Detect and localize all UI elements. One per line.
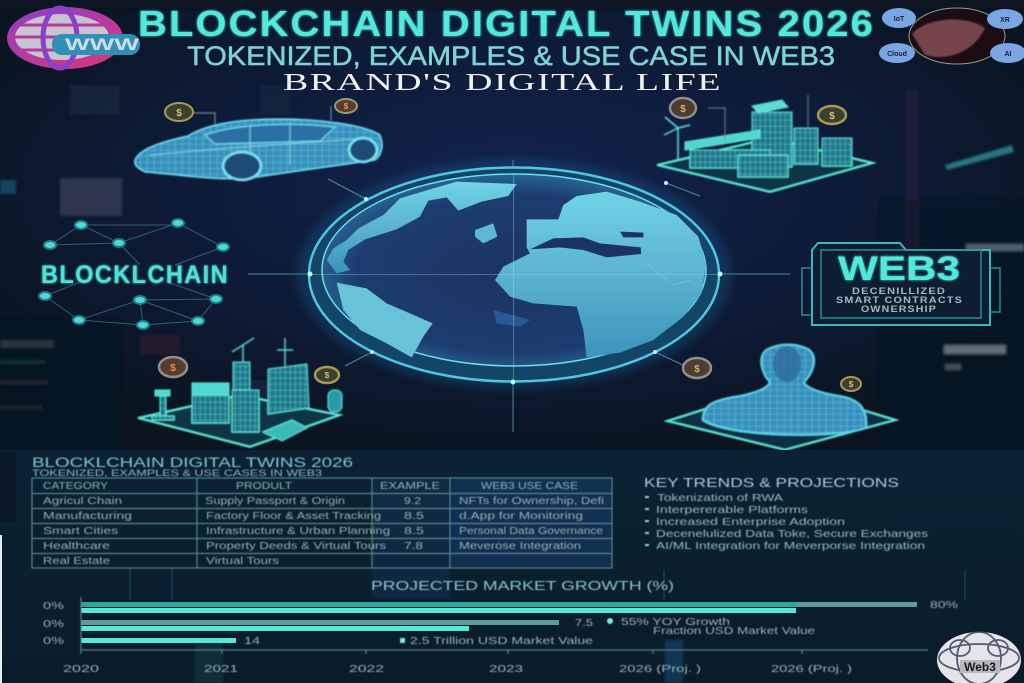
factory hologram xyxy=(657,95,873,192)
web3 panel: SMART CONTRACTS xyxy=(836,295,963,305)
table row: manufacturing: Manufacturing xyxy=(43,511,132,522)
key trends: Interpererable Platforms xyxy=(656,504,808,516)
mediterranean xyxy=(530,237,641,257)
globe xyxy=(296,158,732,390)
table row: agriculture: NFTs for Ownership, Defi xyxy=(459,496,604,507)
coin: city left xyxy=(159,357,187,377)
chart value labels: 0% xyxy=(43,635,64,647)
subtitle: TOKENIZED, EXAMPLES & USE CASE IN WEB3 xyxy=(187,41,835,71)
table row: healthcare: Healthcare xyxy=(43,541,111,552)
web3 panel: OWNERSHIP xyxy=(861,304,937,314)
chart axis: 2021 xyxy=(204,663,238,675)
table row: healthcare: Property Deeds & Virtual Tours xyxy=(206,541,386,552)
coin: city right: $ xyxy=(325,371,330,380)
logo: IoT badge: AI xyxy=(1004,51,1012,58)
table row: healthcare xyxy=(43,541,581,552)
table row: smart cities: Smart Cities xyxy=(43,526,118,537)
chart bars xyxy=(81,602,917,643)
chart axis: 2026 (Proj. ) xyxy=(771,663,852,675)
land: europe and africa xyxy=(495,192,706,357)
key trends: Increased Enterprise Adoption xyxy=(656,516,845,528)
key trends: Tokenization of RWA xyxy=(657,492,783,504)
table xyxy=(32,478,612,568)
coin: factory left xyxy=(670,98,696,118)
chart annotation: market value: 2.5 Trillion USD Market Value xyxy=(410,635,593,647)
table header row: PRODULT xyxy=(236,481,292,492)
chart: projected market growth xyxy=(43,578,958,675)
key trends: Decenelulized Data Toke, Secure Exchanges xyxy=(656,528,928,540)
table row: real estate: Virtual Tours xyxy=(206,556,279,567)
coin: car left: $ xyxy=(176,108,182,119)
coin: car left xyxy=(165,103,193,121)
person hologram xyxy=(667,344,896,450)
web3 panel: WEB3 xyxy=(838,250,960,288)
logo: IoT badge: Cloud xyxy=(887,51,907,58)
chart annotation: yoy growth: Fraction USD Market Value xyxy=(653,625,815,637)
chart axis: 2020 xyxy=(63,663,99,675)
chart axis: 2022 xyxy=(349,663,384,675)
key trends: AI/ML Integration for Meverporse Integration xyxy=(656,540,925,552)
table header row: CATEGORY xyxy=(43,481,108,492)
table row: manufacturing: d.App for Monitoring xyxy=(459,511,583,522)
chart value labels: 14 xyxy=(244,635,260,647)
table row: agriculture: Agricul Chain xyxy=(43,496,122,507)
coin: city right xyxy=(315,367,339,383)
logo: IoT badge: XR xyxy=(1000,17,1010,24)
chart value labels: 80% xyxy=(930,599,958,611)
table row: smart cities: 8.5 xyxy=(404,526,425,537)
logo: www globe xyxy=(7,7,140,69)
table row: healthcare: 7.8 xyxy=(404,541,424,552)
blockchain label: BLOCKLCHAIN xyxy=(41,261,229,289)
table row: manufacturing xyxy=(43,511,583,522)
table row: smart cities: Personal Data Governance xyxy=(459,526,604,537)
coin: person left: $ xyxy=(694,364,700,375)
key trends: KEY TRENDS & PROJECTIONS xyxy=(644,476,899,490)
table heading xyxy=(32,455,353,478)
logo: web3 badge xyxy=(937,632,1021,683)
city hologram xyxy=(138,338,342,447)
table row: agriculture: Supply Passport & Origin xyxy=(205,496,345,507)
blockchain network xyxy=(39,219,229,329)
coin: person left xyxy=(683,358,711,378)
land: south america xyxy=(337,283,433,357)
logo: IoT badge: IoT xyxy=(894,16,905,23)
chart axis xyxy=(63,597,928,675)
key trends xyxy=(644,476,928,552)
logo: IoT badge xyxy=(879,8,1024,64)
coin: city left: $ xyxy=(170,363,176,374)
chart annotation: yoy growth xyxy=(607,616,815,637)
coin: factory right xyxy=(818,106,846,124)
table row: smart cities xyxy=(43,526,604,537)
table row: real estate xyxy=(43,556,279,567)
table header row: WEB3 USE CASE xyxy=(481,481,578,492)
table header row xyxy=(43,481,578,492)
chart axis: 2023 xyxy=(489,663,523,675)
table row: agriculture xyxy=(43,496,604,507)
lower panel xyxy=(0,450,1024,683)
table row: manufacturing: Factory Floor & Asset Tracking xyxy=(206,511,381,522)
web3 panel xyxy=(802,243,1000,325)
chart value labels: 0% xyxy=(43,600,64,612)
land: greenland xyxy=(475,223,497,243)
logo: www globe: WWW xyxy=(65,35,140,54)
chart title: PROJECTED MARKET GROWTH (%) xyxy=(371,578,674,593)
table heading: BLOCKLCHAIN DIGITAL TWINS 2026 xyxy=(32,455,353,470)
coin: person right: $ xyxy=(849,380,854,389)
coin: car right: $ xyxy=(344,102,349,111)
web3 panel: DECENILLIZED xyxy=(852,286,946,296)
connector lines xyxy=(248,160,790,432)
coin: factory right: $ xyxy=(829,111,835,122)
coin: factory left: $ xyxy=(680,104,686,115)
chart axis: 2026 (Proj. ) xyxy=(619,663,701,675)
chart value labels: 0% xyxy=(43,618,64,630)
car hologram xyxy=(135,106,382,180)
table header row: EXAMPLE xyxy=(380,481,440,492)
brand line: BRAND'S DIGITAL LIFE xyxy=(283,70,722,96)
title: BLOCKCHAIN DIGITAL TWINS 2026 xyxy=(138,3,875,44)
table row: smart cities: Infrastructure & Urban Planning xyxy=(206,526,390,537)
logo: web3 badge: Web3 xyxy=(964,660,996,674)
table heading: TOKENIZED, EXAMPLES & USE CASES IN WEB3 xyxy=(32,468,322,478)
coin: person right xyxy=(841,377,861,391)
chart value labels: 7.5 xyxy=(575,617,593,629)
chart annotation: yoy growth: 55% YOY Growth xyxy=(621,616,730,628)
land: north america xyxy=(327,182,517,273)
coin: car right xyxy=(335,99,357,113)
table row: real estate: Real Estate xyxy=(43,556,111,567)
table row: healthcare: Meverose Integration xyxy=(459,541,581,552)
chart value labels xyxy=(43,599,958,647)
table row: agriculture: 9.2 xyxy=(404,496,422,507)
table row: manufacturing: 8.5 xyxy=(404,511,425,522)
